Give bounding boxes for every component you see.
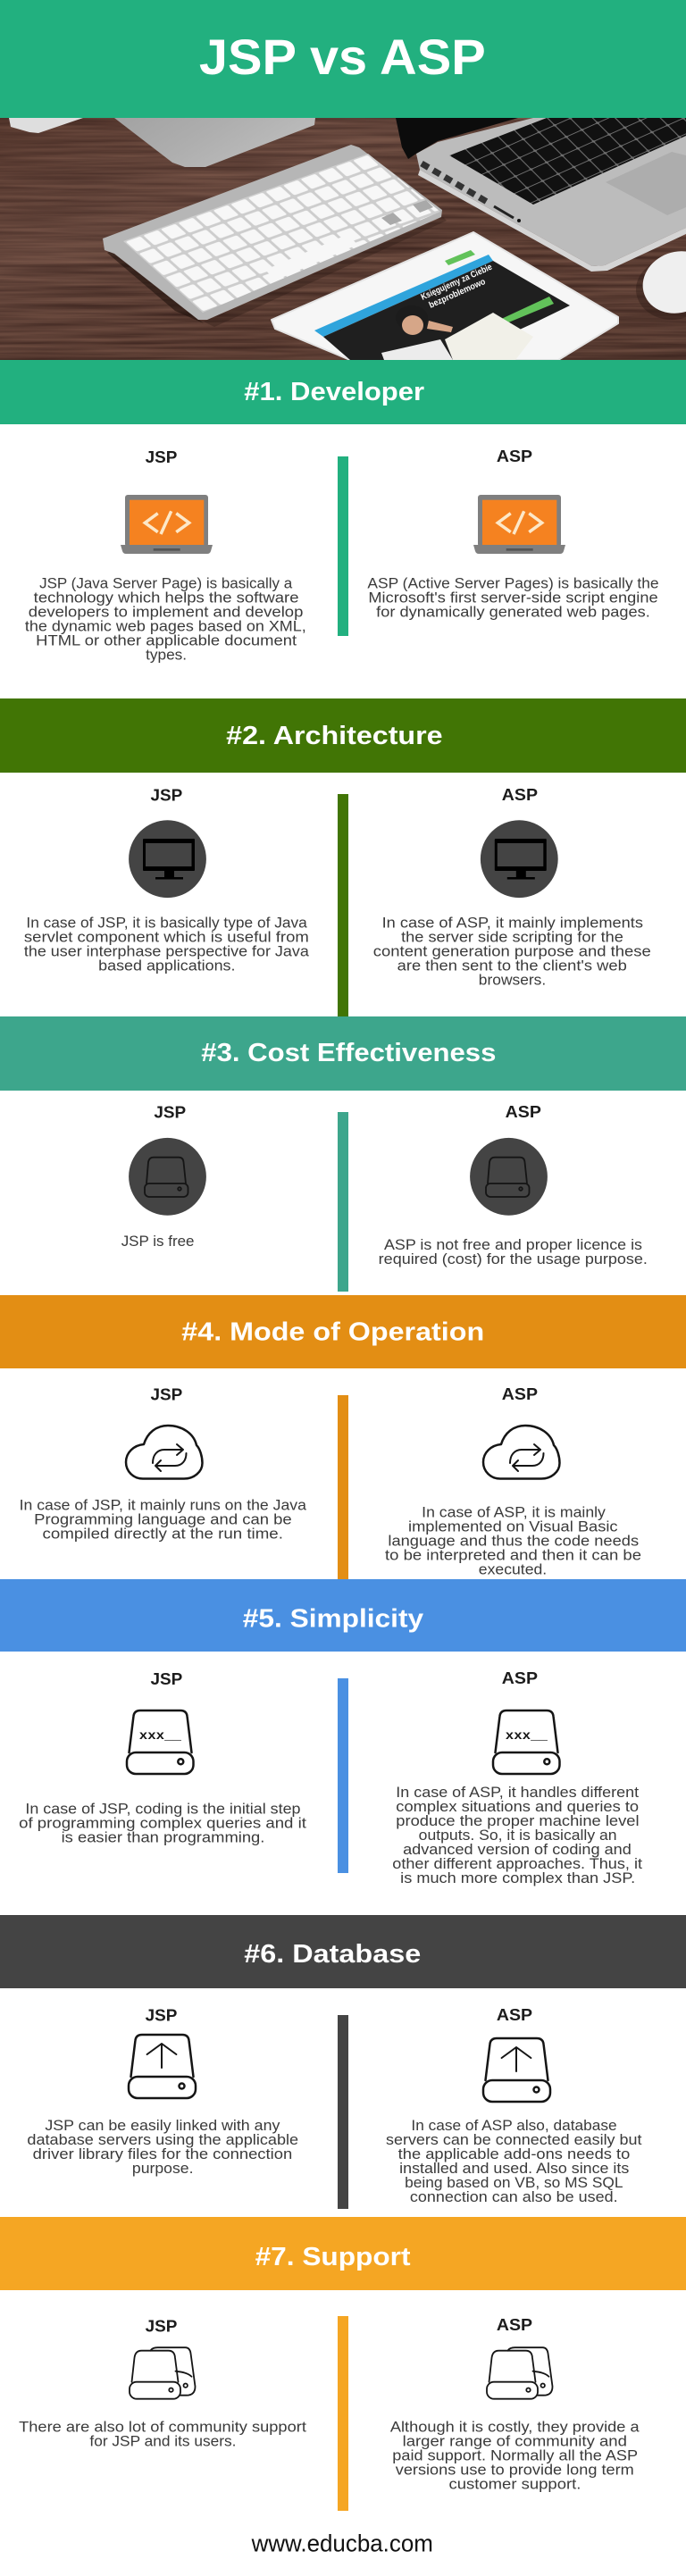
heading: #2 Architecture: #2. Architecture — [226, 722, 443, 750]
JSP text: There are also lot of community support — [19, 2418, 306, 2435]
JSP label: JSP — [150, 1386, 182, 1404]
JSP text — [19, 2418, 306, 2449]
ASP text — [373, 915, 651, 989]
title: JSP vs ASP — [199, 29, 486, 85]
JSP label: JSP — [146, 2317, 177, 2335]
JSP text: JSP (Java Server Page) is basically a — [39, 575, 293, 592]
icon: password drive JSP: xxx__ — [139, 1729, 182, 1744]
ASP text — [390, 2418, 640, 2492]
ASP text: In case of ASP, it is mainly — [422, 1504, 606, 1521]
ASP text: larger range of community and — [403, 2432, 627, 2449]
ASP text: installed and used. Also since its — [399, 2160, 629, 2177]
JSP text: driver library files for the connection — [33, 2145, 292, 2162]
ASP text: outputs. So, it is basically an — [419, 1827, 617, 1844]
ASP text — [385, 1504, 641, 1578]
JSP text: Programming language and can be — [34, 1511, 292, 1528]
ASP label: ASP — [497, 2006, 532, 2024]
icon: monitor ASP — [481, 820, 558, 898]
JSP text: the dynamic web pages based on XML, — [25, 618, 306, 635]
divider — [338, 1678, 348, 1873]
JSP text: purpose. — [132, 2160, 193, 2177]
JSP text — [27, 2117, 298, 2177]
heading: #3 Cost Effectiveness — [0, 1016, 686, 1091]
ASP label: ASP — [506, 1103, 541, 1121]
icon: upload drive JSP — [129, 2035, 196, 2098]
ASP text: In case of ASP, it mainly implements — [382, 915, 643, 932]
icon: password drive JSP — [127, 1710, 193, 1774]
hero photo: desk with keyboard, laptop, tablet and mouse — [0, 118, 686, 360]
ASP text: executed. — [479, 1561, 547, 1578]
JSP label: JSP — [154, 1104, 186, 1122]
heading: #7 Support — [0, 2217, 686, 2290]
JSP text: JSP can be easily linked with any — [45, 2117, 280, 2134]
icon: double drive JSP — [130, 2347, 195, 2399]
icon: laptop code ASP — [473, 495, 565, 554]
heading: #4 Mode of Operation: #4. Mode of Operation — [181, 1318, 484, 1347]
ASP text: language and thus the code needs — [388, 1533, 639, 1550]
hero photo: desk with keyboard, laptop, tablet and mouse: bezproblemowo — [428, 277, 487, 311]
ASP label: ASP — [502, 786, 538, 804]
ASP text: Although it is costly, they provide a — [390, 2418, 640, 2435]
ASP label: ASP — [502, 1385, 538, 1403]
ASP text: In case of ASP also, database — [411, 2117, 617, 2134]
heading: #7 Support: #7. Support — [255, 2243, 411, 2271]
heading: #1 Developer: #1. Developer — [244, 378, 424, 406]
icon: password drive ASP: xxx__ — [506, 1729, 548, 1744]
heading: #5 Simplicity — [0, 1579, 686, 1652]
ASP text — [379, 1236, 648, 1267]
ASP label: ASP — [497, 2316, 532, 2334]
ASP text: servers can be connected easily but — [386, 2131, 642, 2148]
JSP text: In case of JSP, coding is the initial step — [25, 1801, 301, 1818]
ASP text: produce the proper machine level — [396, 1812, 640, 1829]
ASP text: required (cost) for the usage purpose. — [379, 1250, 648, 1267]
JSP text: developers to implement and develop — [29, 604, 303, 621]
ASP text: paid support. Normally all the ASP — [392, 2446, 638, 2463]
icon: double drive ASP — [487, 2347, 552, 2399]
JSP text: of programming complex queries and it — [19, 1815, 306, 1832]
ASP text: connection can also be used. — [410, 2188, 618, 2205]
footer: website: www.educba.com — [251, 2530, 433, 2557]
icon: password drive ASP — [493, 1710, 559, 1774]
panel: #5 Simplicity — [0, 1579, 686, 1886]
ASP text: advanced version of coding and — [403, 1841, 632, 1858]
JSP text: database servers using the applicable — [27, 2131, 298, 2148]
ASP text: is much more complex than JSP. — [400, 1869, 635, 1886]
panel: #6 Database — [0, 1915, 686, 2209]
JSP text: technology which helps the software — [34, 590, 298, 606]
ASP text — [386, 2117, 642, 2205]
ASP text: implemented on Visual Basic — [408, 1518, 618, 1535]
heading: #6 Database — [0, 1915, 686, 1988]
heading: #6 Database: #6. Database — [244, 1940, 421, 1969]
JSP text: HTML or other applicable document — [36, 632, 297, 649]
icon: laptop code JSP — [121, 495, 213, 554]
ASP text: complex situations and queries to — [396, 1798, 639, 1815]
ASP text: the server side scripting for the — [401, 929, 623, 946]
heading: #3 Cost Effectiveness: #3. Cost Effectiveness — [201, 1039, 496, 1067]
icon: drive JSP — [129, 1138, 206, 1216]
ASP text: ASP is not free and proper licence is — [384, 1236, 642, 1253]
heading: #1 Developer — [0, 360, 686, 424]
hero photo: desk with keyboard, laptop, tablet and mouse: Księgujemy za Ciebie — [420, 263, 494, 303]
divider — [338, 2316, 348, 2511]
ASP text: browsers. — [479, 972, 546, 989]
ASP text: are then sent to the client's web — [397, 958, 627, 974]
JSP text: JSP is free — [121, 1233, 195, 1250]
panel: #4 Mode of Operation — [0, 1295, 686, 1579]
JSP text: In case of JSP, it mainly runs on the Java — [20, 1497, 306, 1514]
divider — [338, 1112, 348, 1292]
JSP text: is easier than programming. — [62, 1829, 264, 1846]
panel: #3 Cost Effectiveness — [0, 1016, 686, 1292]
divider — [338, 1395, 348, 1579]
divider — [338, 2015, 348, 2209]
panel: #2 Architecture — [0, 698, 686, 1016]
JSP text — [20, 1497, 306, 1543]
heading: #2 Architecture — [0, 698, 686, 773]
JSP text: servlet component which is useful from — [24, 929, 309, 946]
panel: #1 Developer — [0, 360, 686, 664]
JSP text: the user interphase perspective for Java — [24, 943, 309, 960]
icon: upload drive ASP — [483, 2038, 550, 2102]
ASP text: for dynamically generated web pages. — [376, 604, 650, 621]
JSP label: JSP — [146, 448, 177, 466]
ASP label: ASP — [502, 1669, 538, 1687]
panel: #7 Support — [0, 2217, 686, 2511]
ASP text: to be interpreted and then it can be — [385, 1547, 641, 1564]
JSP text: for JSP and its users. — [89, 2432, 237, 2449]
ASP text: the applicable add-ons needs to — [398, 2145, 630, 2162]
heading: #4 Mode of Operation — [0, 1295, 686, 1368]
icon: cloud sync ASP — [483, 1426, 559, 1479]
ASP text — [367, 575, 659, 621]
JSP label: JSP — [146, 2006, 177, 2024]
ASP text: Microsoft's first server-side script engine — [368, 590, 658, 606]
icon: drive ASP — [470, 1138, 548, 1216]
ASP text: versions use to provide long term — [396, 2461, 634, 2478]
JSP label: JSP — [150, 787, 182, 805]
JSP label: JSP — [150, 1670, 182, 1688]
JSP text — [25, 575, 306, 664]
ASP text: content generation purpose and these — [373, 943, 651, 960]
icon: cloud sync JSP — [126, 1426, 202, 1479]
JSP text: In case of JSP, it is basically type of Java — [26, 915, 307, 932]
JSP text: based applications. — [98, 958, 236, 974]
ASP text: In case of ASP, it handles different — [396, 1784, 639, 1801]
divider — [338, 794, 348, 1016]
divider — [338, 456, 348, 636]
ASP text: being based on VB, so MS SQL — [405, 2174, 623, 2191]
JSP text: types. — [146, 647, 187, 664]
icon: monitor JSP — [129, 820, 206, 898]
ASP text: ASP (Active Server Pages) is basically the — [367, 575, 659, 592]
JSP text: compiled directly at the run time. — [43, 1526, 283, 1543]
ASP text: customer support. — [448, 2475, 581, 2492]
ASP text: other different approaches. Thus, it — [392, 1855, 642, 1872]
ASP label: ASP — [497, 447, 532, 465]
title — [0, 0, 686, 118]
JSP text — [19, 1801, 306, 1846]
ASP text — [392, 1784, 642, 1886]
heading: #5 Simplicity: #5. Simplicity — [243, 1605, 423, 1634]
JSP text — [24, 915, 309, 974]
